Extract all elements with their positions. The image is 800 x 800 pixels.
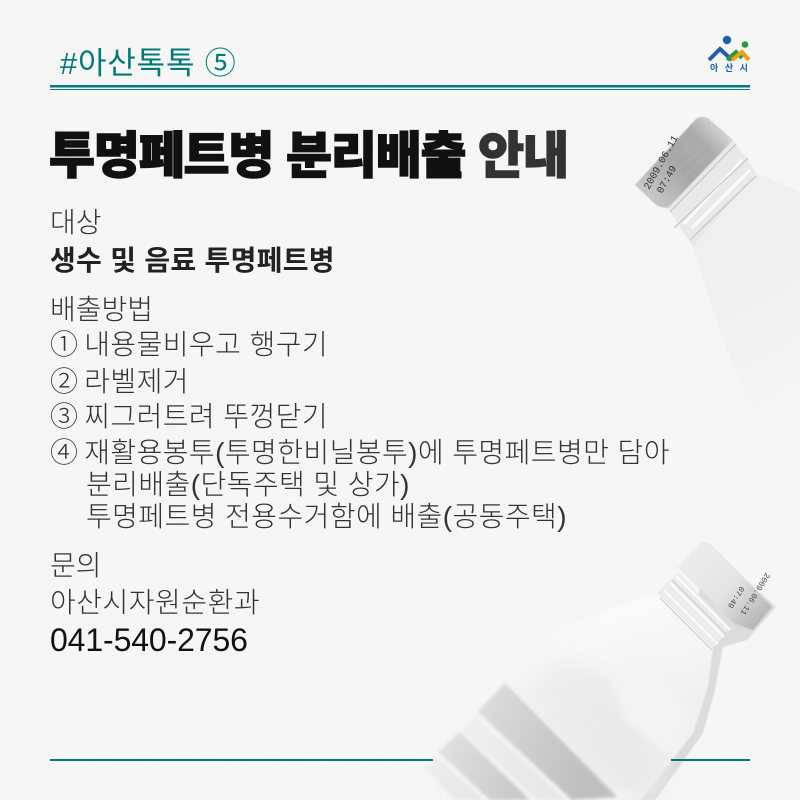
step 4: ④ 재활용봉투(투명한비닐봉투)에 투명페트병만 담아: [50, 437, 670, 468]
top rule: [50, 85, 750, 90]
step 2: ② 라벨제거: [50, 366, 189, 397]
bottom bottle: 07:49: [725, 584, 745, 610]
bottom bottle: 2009.06.11: [738, 571, 771, 616]
target value: 생수 및 음료 투명페트병: [50, 245, 335, 276]
contact label: 문의: [50, 550, 102, 581]
step 4 detail 1: 분리배출(단독주택 및 상가): [86, 469, 410, 500]
contact phone: 041-540-2756: [50, 622, 248, 658]
bottom rule: [50, 759, 750, 761]
top bottle: 2009.06.11: [643, 134, 682, 192]
bottom bottle: [432, 542, 776, 800]
contact department: 아산시자원순환과: [50, 587, 260, 618]
step 1: ① 내용물비우고 행구기: [50, 329, 328, 360]
icon: Asan city logo: 아 산 시: [710, 61, 750, 74]
top bottle: 07:49: [656, 164, 680, 196]
top bottle: [635, 117, 800, 470]
step 4 detail 2: 투명페트병 전용수거함에 배출(공동주택): [86, 501, 567, 532]
title: 투명페트병 분리배출 안내: [49, 128, 568, 184]
icon: Asan city logo: [709, 36, 750, 74]
method label: 배출방법: [50, 294, 153, 325]
series tag: #아산톡톡 ⑤: [60, 46, 237, 81]
step 3: ③ 찌그러트려 뚜껑닫기: [50, 401, 328, 432]
target label: 대상: [50, 207, 102, 238]
